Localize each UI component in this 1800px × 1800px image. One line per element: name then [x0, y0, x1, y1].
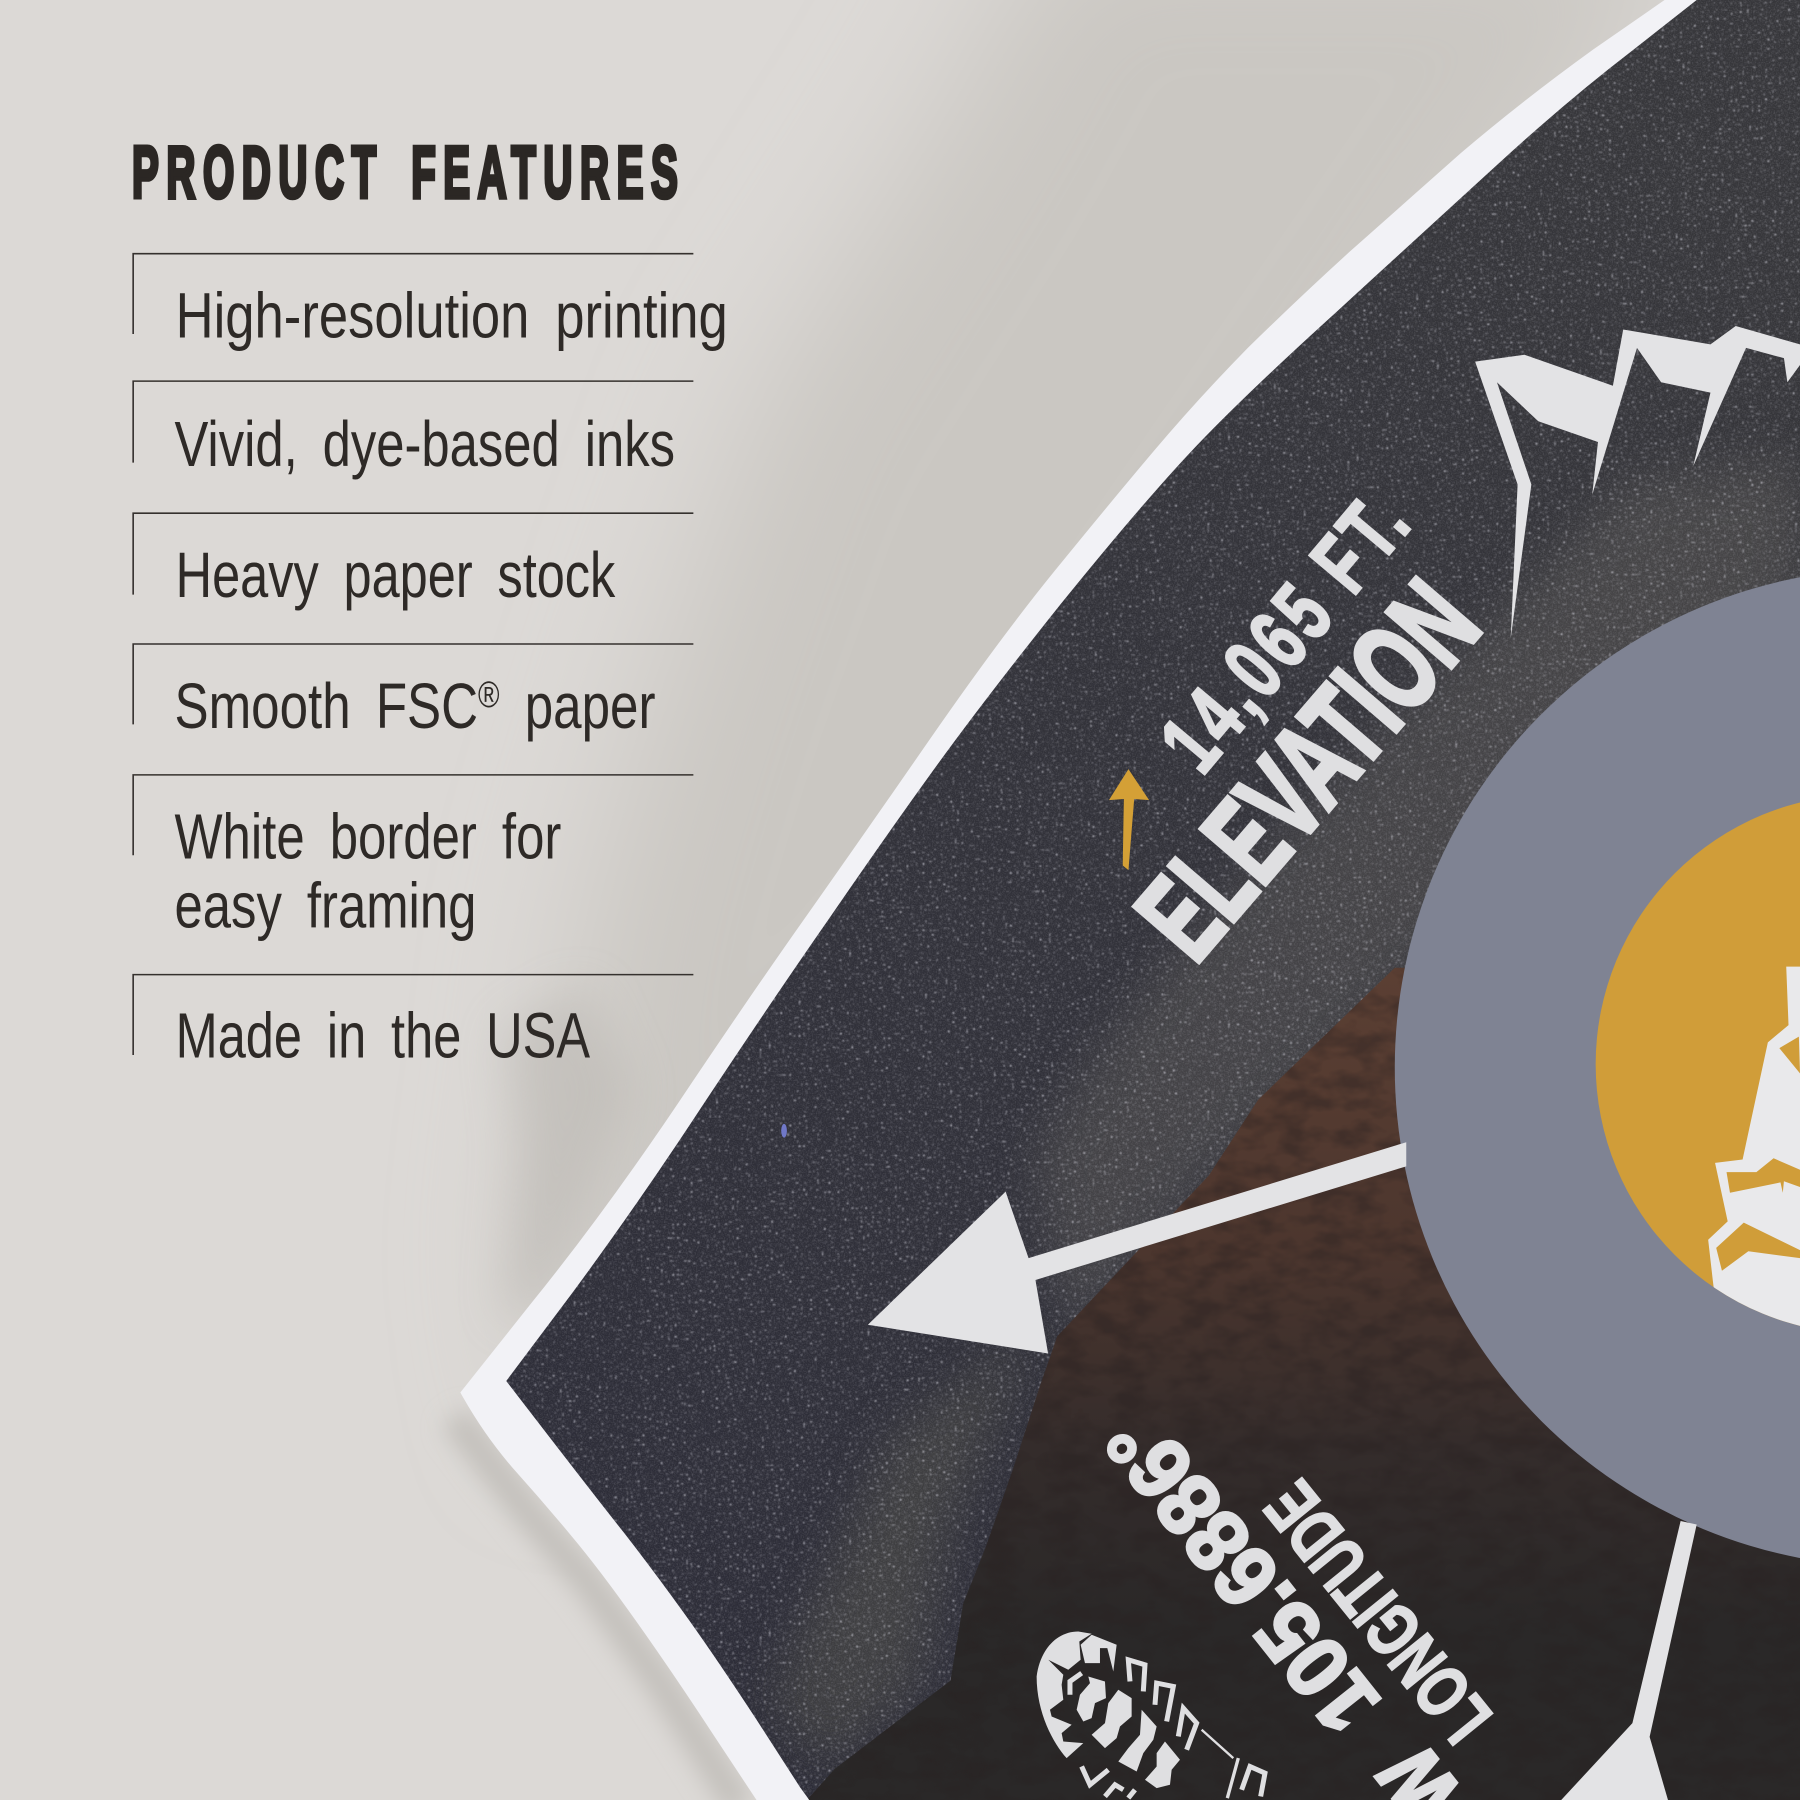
feature: smooth FSC paper: ®	[478, 674, 500, 715]
icon: hiking boot sole	[1037, 1631, 1265, 1798]
feature: made in the USA: Made in the USA	[176, 999, 590, 1071]
feature: made in the USA	[133, 975, 693, 1071]
paper cast shadow	[455, 0, 1722, 1800]
elevation label: ELEVATION	[1111, 556, 1505, 984]
brown mountain silhouette	[807, 968, 1800, 1800]
longitude value: 105.6886°	[1088, 1395, 1398, 1751]
milky way glow	[1033, 459, 1800, 1343]
compass outer grey ring	[1395, 568, 1800, 1567]
star field	[459, 0, 1800, 1800]
feature: high-resolution printing	[133, 254, 728, 352]
star noise	[459, 0, 1800, 1800]
icon: mountain range outline	[1475, 326, 1800, 638]
poster night sky artwork	[459, 0, 1800, 1800]
feature: white border for easy framing	[133, 775, 693, 942]
compass inner orange disc	[1596, 794, 1800, 1334]
feature: white border for easy framing: White border for	[174, 801, 561, 873]
title: PRODUCT FEATURES	[132, 130, 685, 213]
feature: smooth FSC paper: paper	[500, 670, 655, 742]
feature: high-resolution printing: High-resolution printing	[176, 279, 728, 351]
longitude value	[1088, 1395, 1480, 1800]
arrow: west compass pointer	[868, 1142, 1406, 1353]
mountain rock texture	[1058, 974, 1469, 1380]
feature: smooth FSC paper: Smooth FSC	[174, 670, 556, 742]
poster paper white border	[460, 0, 1800, 1800]
arrow: south compass pointer	[1561, 1521, 1697, 1800]
feature: heavy paper stock: Heavy paper stock	[176, 539, 616, 611]
longitude label: LONGITUDE	[1248, 1466, 1507, 1758]
icon: white mountain in disc	[1708, 967, 1800, 1355]
elevation value: 14,065 FT.	[1142, 472, 1430, 789]
feature: vivid dye-based inks: Vivid, dye-based inks	[174, 408, 675, 480]
grey haze near ridge	[780, 1376, 1001, 1750]
feature: vivid dye-based inks	[133, 381, 693, 480]
feature: white border for easy framing: easy framing	[174, 870, 476, 942]
feature: heavy paper stock	[133, 513, 693, 611]
feature: smooth FSC paper	[133, 644, 693, 742]
feature list	[133, 254, 728, 1071]
blue star	[781, 1124, 787, 1138]
icon: small orange up arrow	[1109, 769, 1149, 870]
